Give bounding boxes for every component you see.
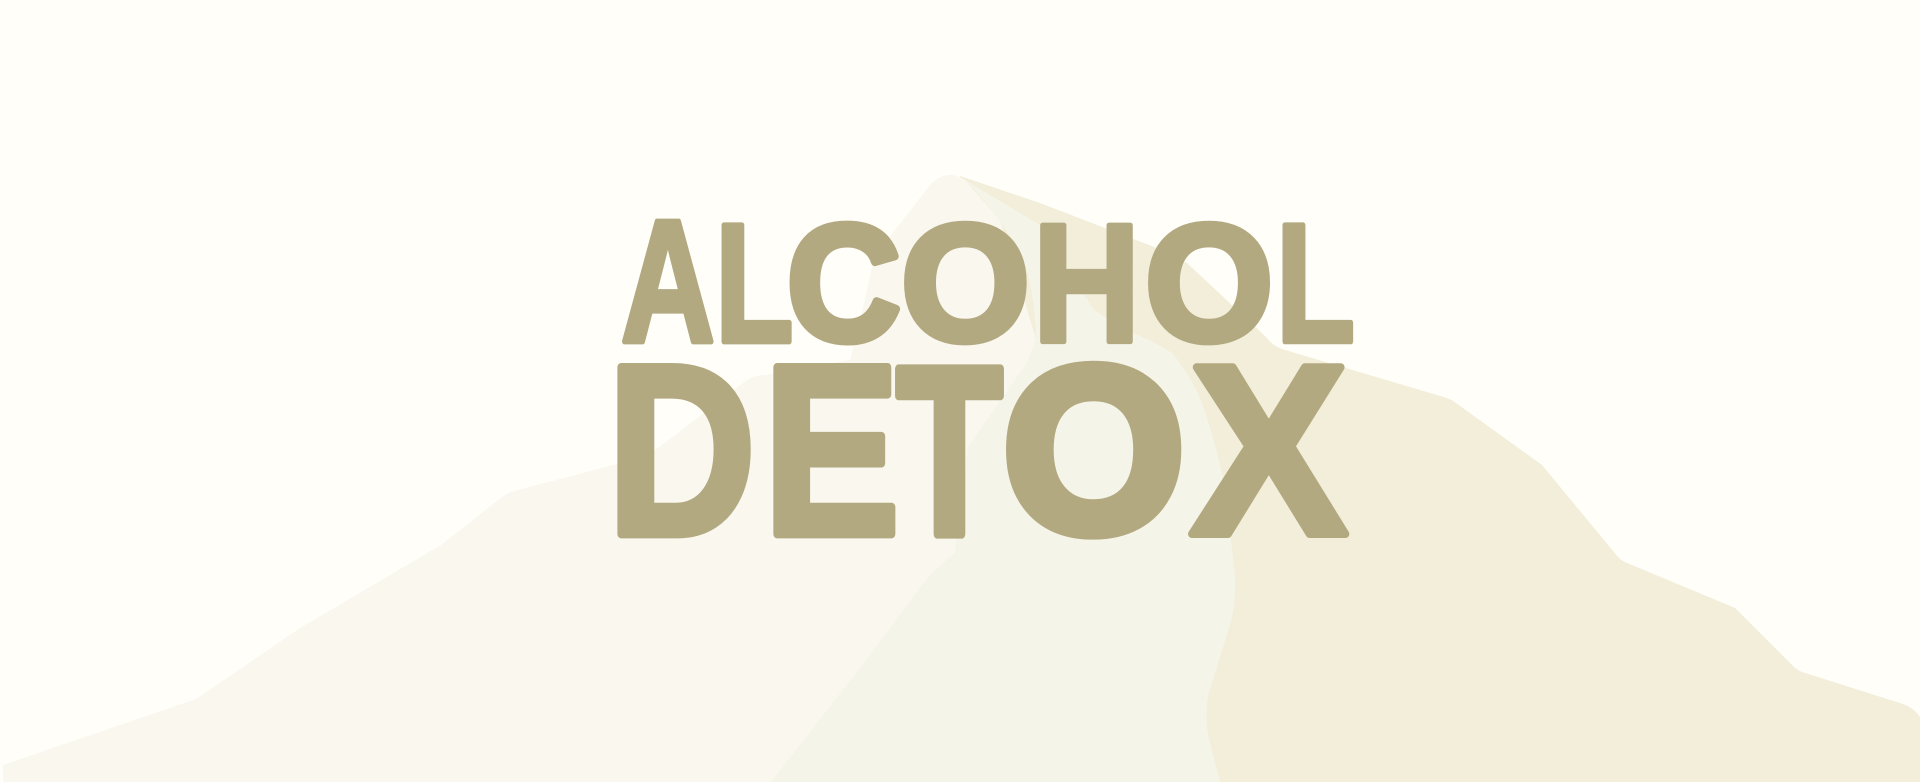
title: DETOX <box>607 314 1347 586</box>
letter A: A <box>621 184 715 379</box>
letter D: D <box>607 315 756 586</box>
mountain: central shadow <box>771 180 1235 782</box>
letter X: X <box>1190 314 1347 586</box>
letter C: C <box>787 191 901 376</box>
mountain: left light slope <box>3 175 1040 782</box>
letter L: L <box>715 188 793 378</box>
letter E: E <box>763 315 900 586</box>
title: ALCOHOL <box>621 184 1355 379</box>
letter O: O <box>1145 190 1273 375</box>
mountain: right dark slope <box>960 176 1920 782</box>
letter O: O <box>1004 321 1184 580</box>
letter L: L <box>1276 189 1355 377</box>
letter H: H <box>1032 189 1141 378</box>
letter T: T <box>896 318 1003 586</box>
letter O: O <box>901 191 1030 375</box>
